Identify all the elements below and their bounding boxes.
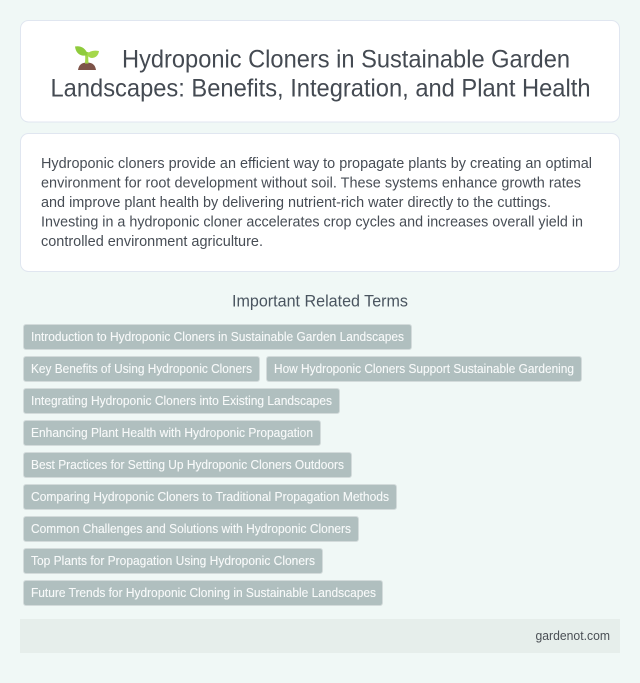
tag: key benefits: [24, 356, 260, 382]
tag: integrating: Integrating Hydroponic Cloners into Existing Landscapes: [31, 394, 332, 408]
panel: title card: [20, 20, 620, 122]
title: Landscapes: Benefits, Integration, and Plant Health: [50, 74, 590, 102]
text block: intro paragraph: controlled environment agriculture.: [41, 233, 263, 250]
text block: intro paragraph: environment for root development without soil. These systems enhance growth rates: [41, 174, 581, 192]
title: [50, 46, 590, 102]
text block: intro paragraph: and improve plant health by delivering nutrient-rich water directly to the cuttings.: [41, 194, 551, 211]
tag: challenges: [24, 516, 358, 542]
tag: top plants: Top Plants for Propagation Using Hydroponic Cloners: [31, 554, 315, 568]
panel: intro paragraph card: [20, 134, 620, 272]
tag: plant health: [24, 420, 320, 446]
tag: integrating: [24, 388, 340, 414]
text block: intro paragraph: Investing in a hydroponic cloner accelerates crop cycles and increases overall yield in: [41, 214, 583, 230]
tag: plant health: Enhancing Plant Health with Hydroponic Propagation: [31, 426, 313, 440]
icon: seedling: [75, 46, 99, 70]
title: Hydroponic Cloners in Sustainable Garden: [122, 46, 570, 74]
tag: top plants: [24, 548, 322, 574]
tag: best practices: [24, 452, 352, 478]
tag: future trends: [24, 580, 382, 606]
heading: important related terms: Important Related Terms: [232, 292, 408, 310]
tag: key benefits: Key Benefits of Using Hydroponic Cloners: [31, 362, 252, 376]
footer: [20, 619, 620, 653]
tag: comparing: Comparing Hydroponic Cloners to Traditional Propagation Methods: [31, 490, 389, 504]
tag: best practices: Best Practices for Setting Up Hydroponic Cloners Outdoors: [31, 458, 344, 472]
tag: sustainable gardening support: How Hydroponic Cloners Support Sustainable Gardening: [274, 362, 574, 376]
text block: intro paragraph: Hydroponic cloners provide an efficient way to propagate plants by creating an optimal: [41, 155, 592, 172]
tag: introduction: [24, 324, 412, 350]
tag: future trends: Future Trends for Hydroponic Cloning in Sustainable Landscapes: [31, 586, 376, 600]
tag: sustainable gardening support: [266, 356, 582, 382]
footer source text: gardenot.com: [536, 629, 610, 643]
tag: comparing: [24, 484, 396, 510]
text block: intro paragraph: [41, 155, 592, 250]
tag: challenges: Common Challenges and Solutions with Hydroponic Cloners: [31, 522, 351, 536]
tag: introduction: Introduction to Hydroponic Cloners in Sustainable Garden Landscapes: [31, 330, 404, 344]
